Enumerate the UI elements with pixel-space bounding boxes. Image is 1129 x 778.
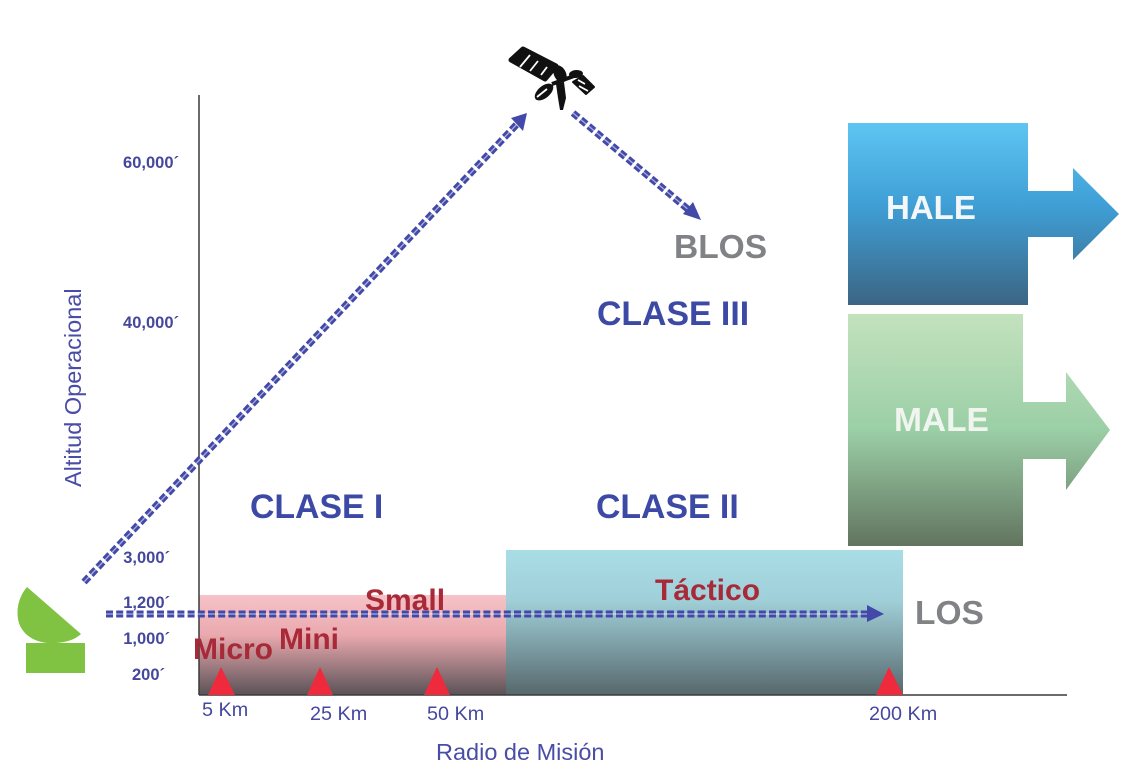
arrow: LOS link: [106, 605, 884, 622]
HALE label: HALE: [886, 189, 976, 226]
class labels: CLASE I: [250, 488, 383, 526]
icon: satellite: [511, 49, 594, 110]
y axis tick labels: 1,000´: [123, 630, 170, 648]
x axis tick labels: 25 Km: [310, 703, 367, 725]
x axis tick labels: 5 Km: [202, 699, 248, 721]
category labels: Small: [365, 584, 445, 617]
MALE block: [848, 314, 1110, 546]
x axis: [199, 694, 1067, 696]
range markers: [208, 667, 903, 695]
band: Clase II tactical range: [506, 550, 903, 695]
y axis tick labels: 1,200´: [123, 594, 170, 612]
category labels: Micro: [193, 633, 273, 666]
x axis tick labels: 50 Km: [427, 703, 484, 725]
HALE block: [848, 123, 1119, 305]
class labels: CLASE II: [596, 488, 739, 526]
class labels: [250, 295, 749, 526]
arrow: uplink to satellite: [84, 113, 527, 582]
class labels: CLASE III: [597, 295, 749, 333]
link labels: [674, 229, 984, 632]
band: Clase I small range: [199, 595, 508, 695]
x axis title: Radio de Misión: [436, 739, 605, 765]
icon: ground antenna: [17, 587, 85, 673]
MALE label: MALE: [894, 402, 989, 439]
link labels: LOS: [915, 595, 984, 632]
category labels: [193, 574, 760, 666]
y axis tick labels: 3,000´: [123, 549, 170, 567]
y axis tick labels: 60,000´: [123, 154, 179, 172]
y axis tick labels: 40,000´: [123, 314, 179, 332]
y axis title: Altitud Operacional: [60, 288, 86, 487]
x axis tick labels: 200 Km: [869, 703, 937, 725]
category labels: Táctico: [655, 574, 760, 607]
link labels: BLOS: [674, 229, 767, 266]
arrow: downlink to BLOS: [573, 113, 701, 220]
category labels: Mini: [279, 623, 339, 656]
x axis tick labels: [202, 699, 937, 725]
y axis tick labels: [123, 154, 179, 684]
y axis: [198, 95, 200, 695]
y axis tick labels: 200´: [132, 666, 165, 684]
